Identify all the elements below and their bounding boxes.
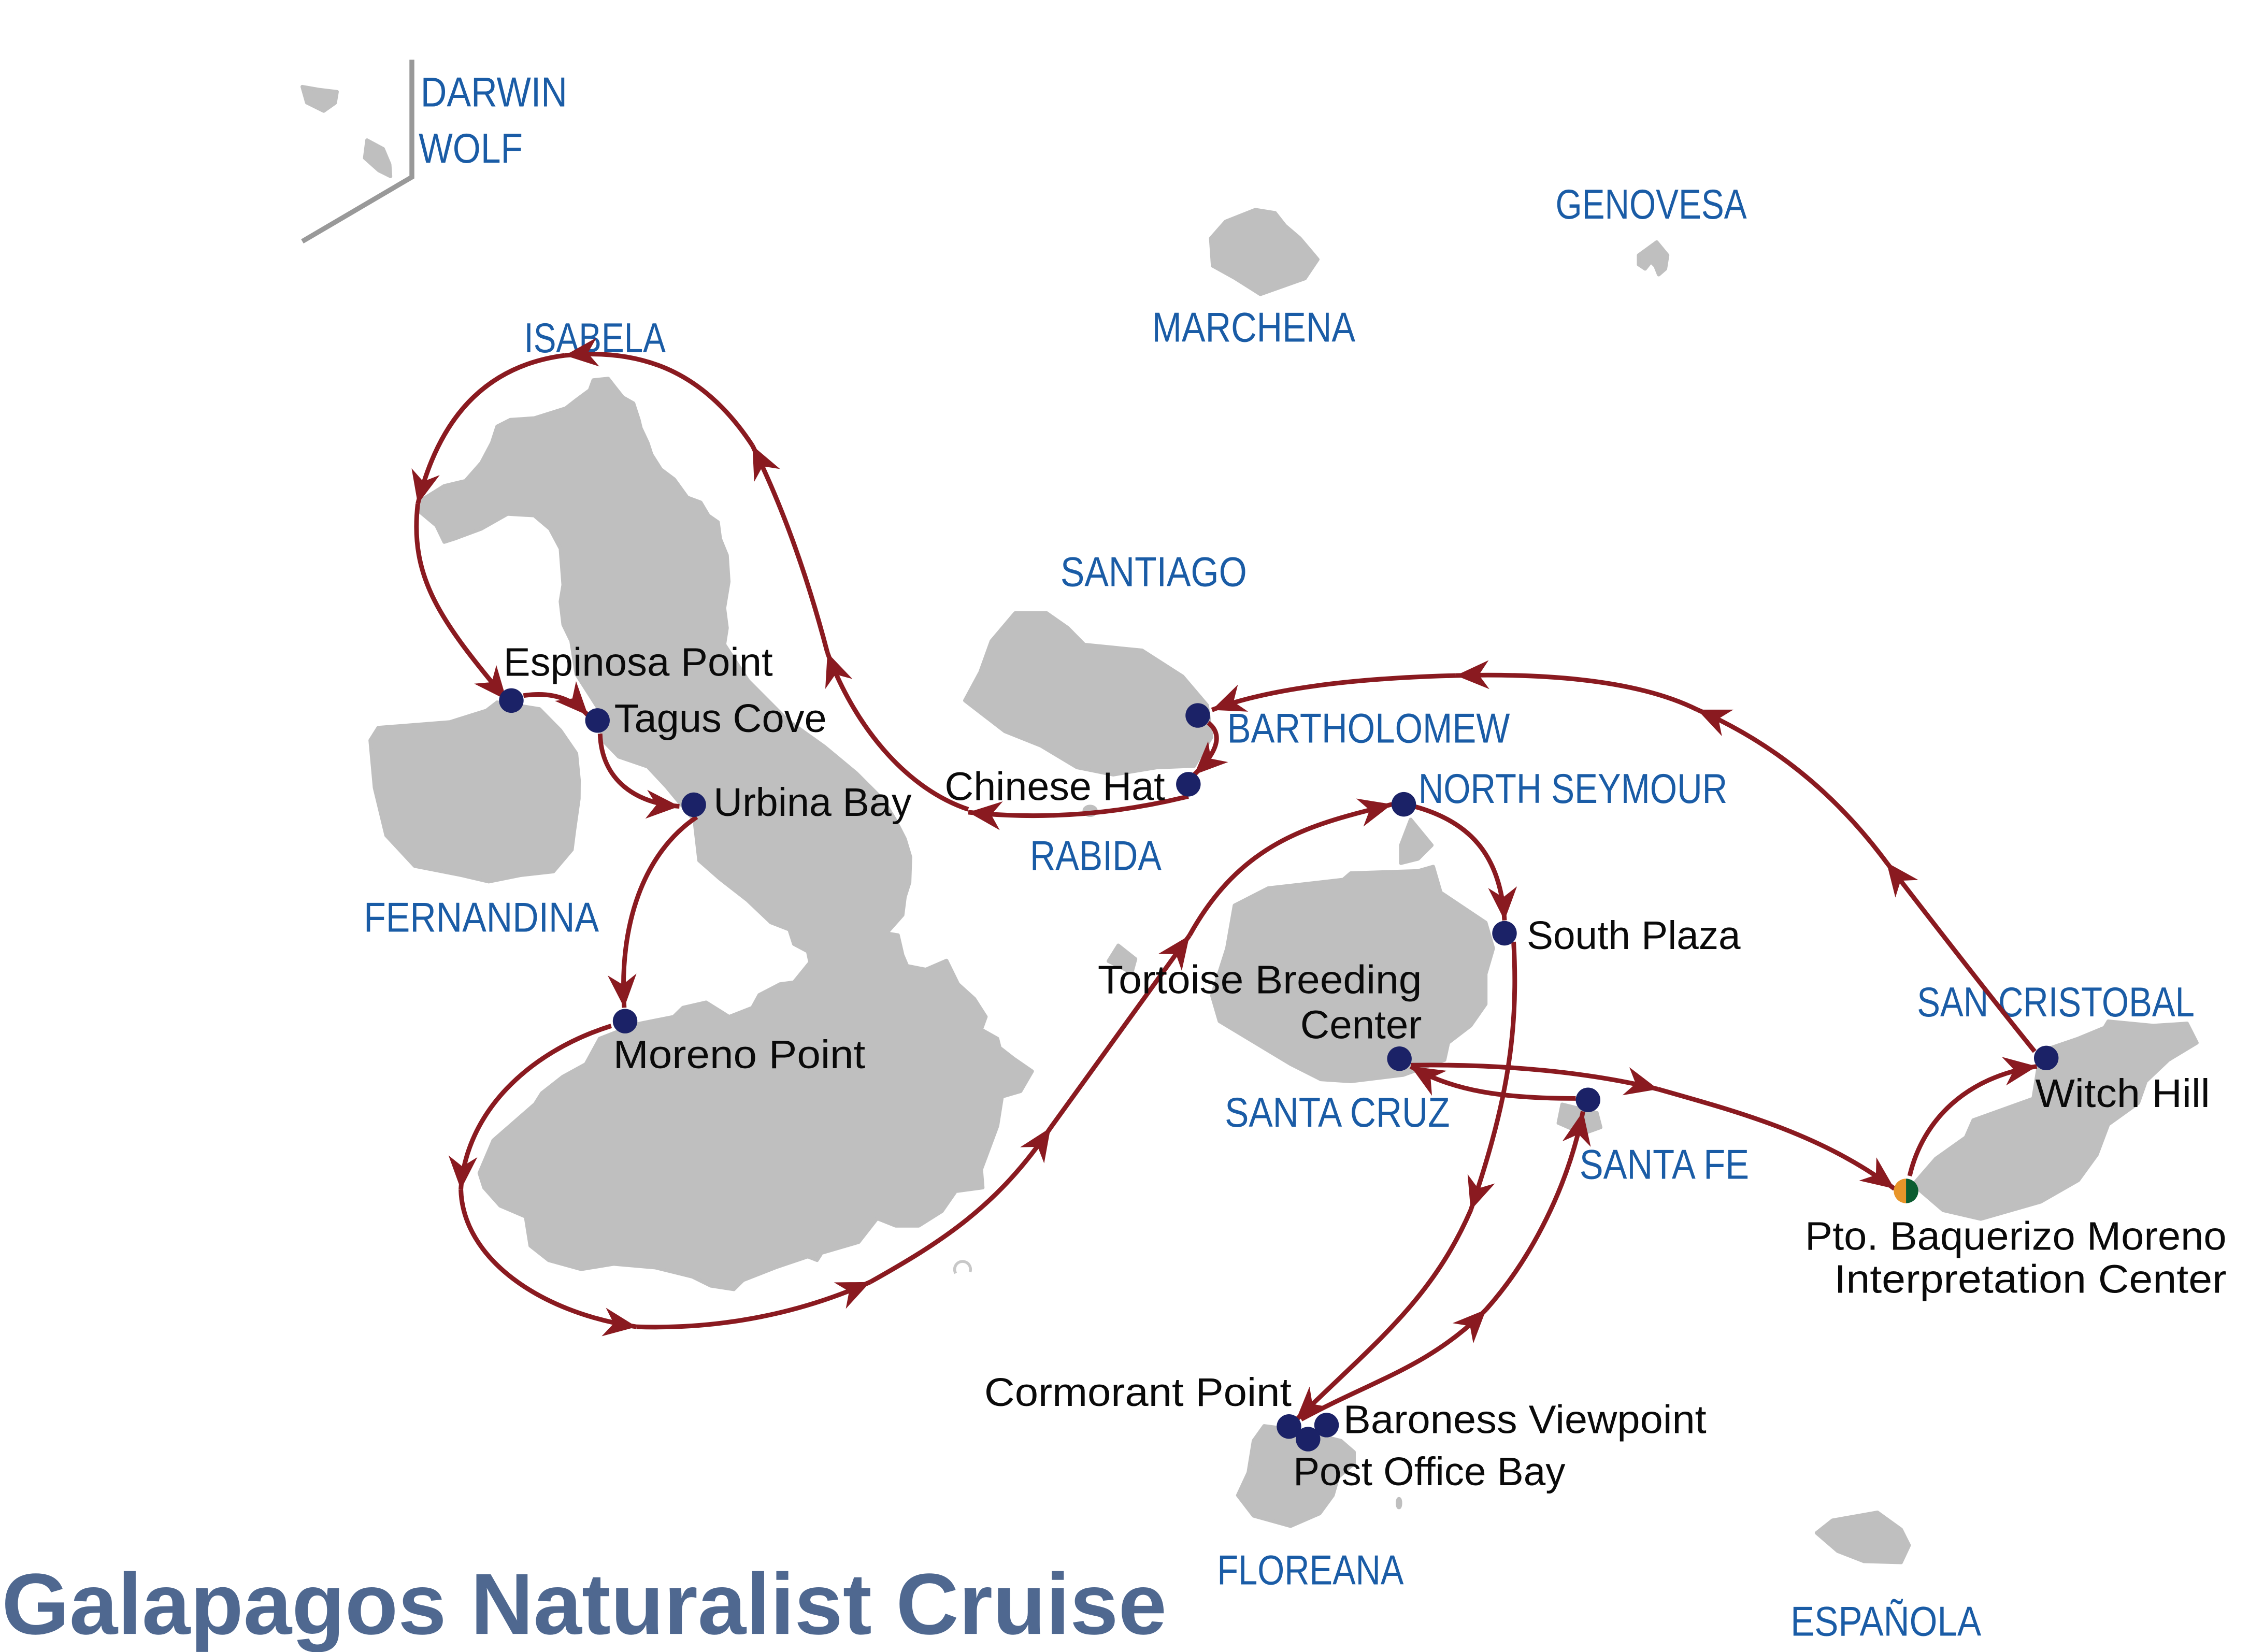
- label: Pto. Baquerizo Moreno Interpretation Center: Pto. Baquerizo Moreno: [1805, 1215, 2227, 1259]
- label: South Plaza: South Plaza: [1527, 914, 1741, 958]
- label: Genovesa: GENOVESA: [1555, 181, 1747, 228]
- arrow: to Espinosa Point: [417, 504, 507, 700]
- label: Rabida: RABIDA: [1030, 833, 1162, 880]
- island: Darwin: [303, 87, 337, 111]
- dot: Santa Fe: [1576, 1087, 1600, 1112]
- arrow: around Isabela south: [461, 1189, 637, 1327]
- arrow: to North Seymour: [1190, 805, 1392, 936]
- island: Wolf: [365, 140, 391, 176]
- label: Espinosa Point: Espinosa Point: [504, 641, 773, 685]
- dot: Post Office Bay: [1296, 1427, 1321, 1452]
- island: Floreana: [1238, 1426, 1354, 1526]
- label: Cormorant Point: Cormorant Point: [984, 1371, 1292, 1415]
- dot: Tortoise Breeding Center: [1387, 1046, 1412, 1071]
- island: North Seymour: [1401, 820, 1432, 863]
- dot: Chinese Hat: [1176, 772, 1201, 797]
- label: Tagus Cove: Tagus Cove: [614, 697, 827, 741]
- arrow: toward northeast: [870, 1128, 1051, 1282]
- label: Tortoise Breeding Center: Tortoise Breeding: [1098, 958, 1422, 1002]
- label: Espanola: ESPAÑOLA: [1790, 1599, 1981, 1645]
- dot: Urbina Bay: [681, 793, 706, 817]
- arrow: toward northwest leg 2: [1697, 710, 1886, 863]
- island: Santa Cruz: [1212, 867, 1493, 1081]
- dot: Tagus Cove: [585, 708, 610, 733]
- label: Wolf: WOLF: [419, 125, 523, 172]
- dot: South Plaza: [1492, 921, 1517, 945]
- arrow: to Santa Fe: [1486, 1112, 1583, 1310]
- arrow: Chinese Hat west: [968, 796, 1188, 816]
- label: Santiago: SANTIAGO: [1061, 549, 1247, 595]
- arrow: Urbina Bay to Moreno Point: [623, 817, 697, 1008]
- arrow: South Plaza south: [1471, 942, 1515, 1210]
- island: Fernandina: [370, 702, 579, 882]
- island: Pinzon: [1109, 945, 1136, 973]
- dot: Cormorant Point: [1277, 1414, 1301, 1439]
- arrow: North Seymour to South Plaza: [1414, 807, 1504, 921]
- arrow: Santa Fe to Santa Cruz: [1411, 1066, 1576, 1098]
- label: Chinese Hat: Chinese Hat: [944, 765, 1165, 809]
- dot: Witch Hill: [2034, 1046, 2058, 1070]
- island name labels: [364, 69, 2195, 1645]
- islands: [303, 60, 2197, 1562]
- island: small islet near Floreana: [1398, 1499, 1400, 1507]
- island: Marchena: [1211, 210, 1318, 294]
- label: San Cristobal: SAN CRISTOBAL: [1917, 979, 2195, 1026]
- label: Santa Cruz: SANTA CRUZ: [1225, 1089, 1450, 1136]
- island: Genovesa: [1639, 242, 1668, 275]
- island: Isabela: [420, 379, 1032, 1289]
- arrow: Floreana northeast: [1301, 1310, 1486, 1419]
- inset line: [303, 60, 412, 241]
- dot: North Seymour: [1392, 792, 1416, 816]
- arrow: Puerto Baquerizo Moreno to Witch Hill: [1910, 1066, 2037, 1176]
- arrow: to Puerto Baquerizo Moreno: [1658, 1089, 1895, 1189]
- island: Espanola: [1816, 1512, 1909, 1562]
- title: Galapagos Naturalist Cruise: [2, 1556, 1167, 1652]
- label: Marchena: MARCHENA: [1152, 305, 1355, 351]
- label: Urbina Bay: Urbina Bay: [713, 781, 912, 825]
- label: Tortoise Breeding Center: [1098, 958, 1422, 1047]
- arrow: north along Isabela: [752, 446, 827, 653]
- label: North Seymour: NORTH SEYMOUR: [1418, 766, 1727, 812]
- dot: Baroness Viewpoint: [1314, 1413, 1339, 1438]
- arrow: toward Santa Cruz west: [1051, 936, 1190, 1128]
- cruise route arrows: [417, 354, 2037, 1420]
- dot: Moreno Point: [613, 1009, 637, 1033]
- arrow: to Bartholomew: [1212, 676, 1456, 710]
- arrow: Espinosa Point to Tagus Cove: [523, 695, 588, 715]
- arrow: Santa Cruz east: [1411, 1065, 1658, 1089]
- label: Post Office Bay: Post Office Bay: [1293, 1450, 1566, 1494]
- visit site labels: [504, 641, 2227, 1494]
- label: Witch Hill: Witch Hill: [2035, 1072, 2210, 1116]
- arrow: around Isabela north: [565, 354, 752, 446]
- label: Bartholomew: BARTHOLOMEW: [1227, 706, 1510, 752]
- arrow: toward northwest leg 3: [1456, 675, 1697, 710]
- arrow: along south coast: [637, 1282, 870, 1327]
- arrow: Moreno Point south: [461, 1026, 611, 1189]
- label: Baroness Viewpoint: Baroness Viewpoint: [1343, 1398, 1707, 1442]
- arrow: Bartholomew to Chinese Hat: [1194, 723, 1216, 774]
- label: Pto. Baquerizo Moreno Interpretation Center: Interpretation Center: [1834, 1258, 2227, 1302]
- label: Tortoise Breeding Center: Center: [1300, 1003, 1422, 1047]
- island: Santiago: [965, 613, 1211, 774]
- label: Isabela: ISABELA: [524, 315, 666, 362]
- label: Santa Fe: SANTA FE: [1580, 1141, 1749, 1188]
- arrow: toward Isabela east coast: [827, 653, 968, 809]
- arrow: to Isabela west: [418, 355, 565, 504]
- label: Darwin: DARWIN: [421, 69, 567, 116]
- label: Fernandina: FERNANDINA: [364, 895, 599, 941]
- island: Rabida: [1084, 807, 1096, 815]
- dot: Puerto Baquerizo Moreno port: [1894, 1179, 1918, 1203]
- visit site dots: [499, 688, 2058, 1452]
- island: Santa Fe: [1558, 1104, 1601, 1133]
- arrow: to Floreana: [1296, 1210, 1471, 1420]
- label: Floreana: FLOREANA: [1217, 1547, 1404, 1594]
- dot: Espinosa Point: [499, 688, 524, 713]
- island: small ring islet: [955, 1261, 970, 1273]
- label: Pto. Baquerizo Moreno Interpretation Center: [1805, 1215, 2227, 1302]
- arrow: Tagus Cove to Urbina Bay: [600, 734, 679, 807]
- dot: Bartholomew: [1185, 703, 1210, 728]
- arrow: Witch Hill northwest: [1886, 863, 2034, 1052]
- island: San Cristobal: [1913, 1021, 2197, 1219]
- label: Moreno Point: Moreno Point: [613, 1033, 865, 1077]
